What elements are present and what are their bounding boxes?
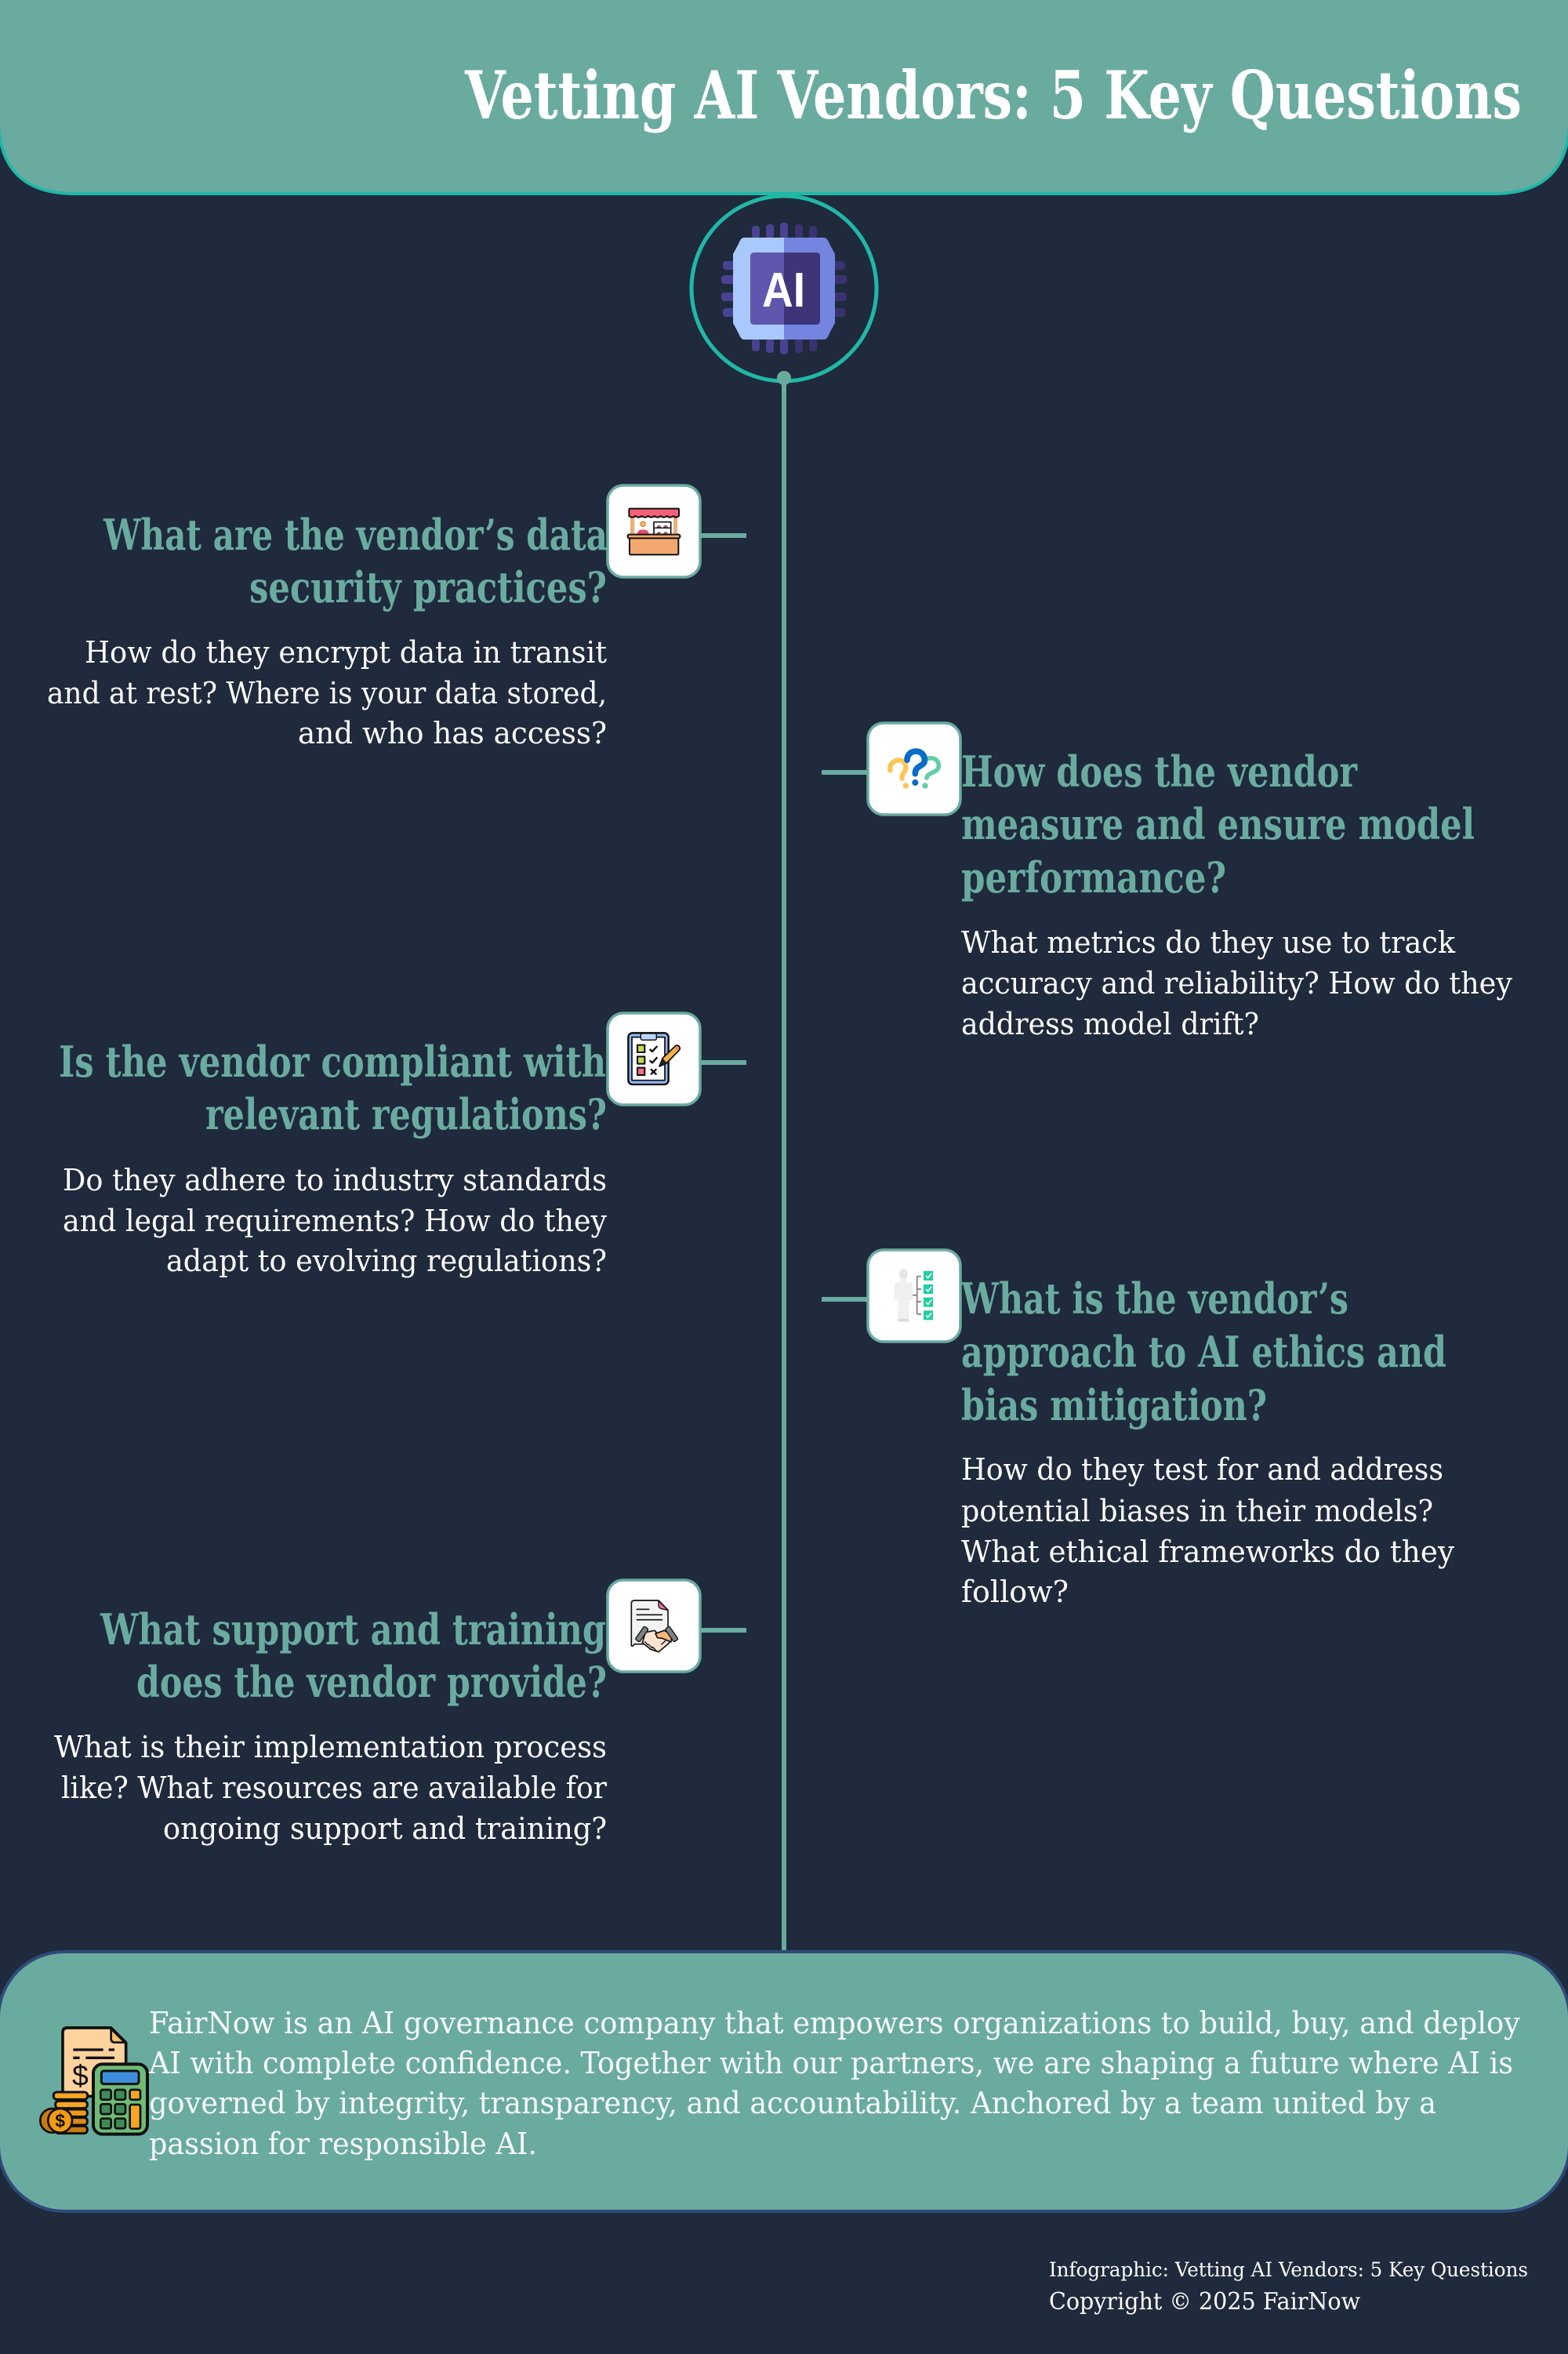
footer description xyxy=(148,2006,1520,2162)
body: ethics: What ethical frameworks do they xyxy=(961,1535,1454,1570)
body: model performance xyxy=(961,925,1512,1042)
body: compliance xyxy=(63,1163,607,1279)
heading: data security: What are the vendor’s data xyxy=(103,510,608,560)
connector 5 xyxy=(700,1628,746,1633)
icon: checklist clipboard xyxy=(608,1013,700,1105)
body: support and training: What is their implementation process xyxy=(54,1730,607,1765)
heading: ethics: approach to AI ethics and xyxy=(961,1327,1446,1377)
connector 1 xyxy=(700,533,746,538)
header banner xyxy=(0,0,1568,194)
body: ethics xyxy=(961,1452,1454,1610)
body: model performance: What metrics do they use to track xyxy=(961,925,1456,961)
icon: invoice, calculator and coins xyxy=(40,2028,147,2134)
body: compliance: adapt to evolving regulations? xyxy=(166,1244,607,1279)
body: support and training: ongoing support and training? xyxy=(163,1811,607,1847)
heading: model performance: performance? xyxy=(961,852,1226,903)
body: data security: and at rest? Where is your data stored, xyxy=(47,676,607,711)
footer panel xyxy=(0,1952,1568,2211)
heading: model performance xyxy=(961,747,1475,903)
body: ethics: follow? xyxy=(961,1575,1069,1610)
question 5: support and training xyxy=(54,1580,746,1847)
footer description: governed by integrity, transparency, and accountability. Anchored by a team united by a xyxy=(149,2086,1436,2121)
heading: data security xyxy=(103,510,608,612)
footer description: passion for responsible AI. xyxy=(149,2127,537,2162)
icon: AI chip in circle: AI xyxy=(762,263,805,318)
body: support and training: like? What resources are available for xyxy=(61,1771,608,1806)
icon: question marks xyxy=(868,723,960,815)
heading: data security: security practices? xyxy=(249,562,607,612)
footer description: AI with complete confidence. Together with our partners, we are shaping a future where AI is xyxy=(148,2046,1513,2081)
heading: compliance: relevant regulations? xyxy=(205,1089,607,1139)
heading: ethics: What is the vendor’s xyxy=(960,1273,1348,1324)
icon: market stall xyxy=(608,485,700,577)
heading: support and training xyxy=(100,1604,607,1707)
question 3: compliance xyxy=(59,1013,746,1279)
body: data security xyxy=(47,635,607,751)
timeline spine xyxy=(782,378,786,1954)
heading: ethics: bias mitigation? xyxy=(961,1380,1267,1430)
body: support and training xyxy=(54,1730,608,1847)
body: data security: How do they encrypt data in transit xyxy=(85,635,607,670)
icon: invoice, calculator and coins: $ xyxy=(72,2058,89,2091)
heading: support and training: What support and training xyxy=(100,1604,606,1655)
body: model performance: address model drift? xyxy=(961,1007,1259,1042)
connector 4 xyxy=(822,1297,868,1302)
icon: person with checklist xyxy=(868,1250,960,1342)
body: compliance: Do they adhere to industry standards xyxy=(63,1163,607,1198)
body: ethics: How do they test for and address xyxy=(961,1452,1443,1488)
connector 3 xyxy=(700,1060,746,1065)
heading: model performance: How does the vendor xyxy=(961,747,1357,797)
body: model performance: accuracy and reliability? How do they xyxy=(961,966,1512,1001)
heading: compliance xyxy=(59,1037,607,1139)
credits: Infographic: Vetting AI Vendors: 5 Key Questions xyxy=(1049,2258,1528,2281)
icon: AI chip in circle xyxy=(691,196,877,385)
heading: ethics xyxy=(960,1273,1446,1430)
question 4: ethics xyxy=(822,1250,1454,1610)
body: compliance: and legal requirements? How do they xyxy=(63,1204,607,1239)
credits xyxy=(1049,2258,1528,2316)
credits: Copyright © 2025 FairNow xyxy=(1049,2288,1360,2316)
body: ethics: potential biases in their models? xyxy=(961,1494,1433,1529)
heading: compliance: Is the vendor compliant with xyxy=(59,1037,606,1087)
connector 2 xyxy=(822,770,868,775)
heading: support and training: does the vendor provide? xyxy=(136,1657,607,1707)
icon: contract handshake xyxy=(608,1580,700,1672)
body: data security: and who has access? xyxy=(298,716,607,751)
icon: invoice, calculator and coins: $ xyxy=(55,2111,65,2131)
question 2: model performance xyxy=(822,723,1512,1042)
footer description: FairNow is an AI governance company that empowers organizations to build, buy, and deploy xyxy=(149,2006,1520,2041)
question 1: data security xyxy=(47,485,746,751)
